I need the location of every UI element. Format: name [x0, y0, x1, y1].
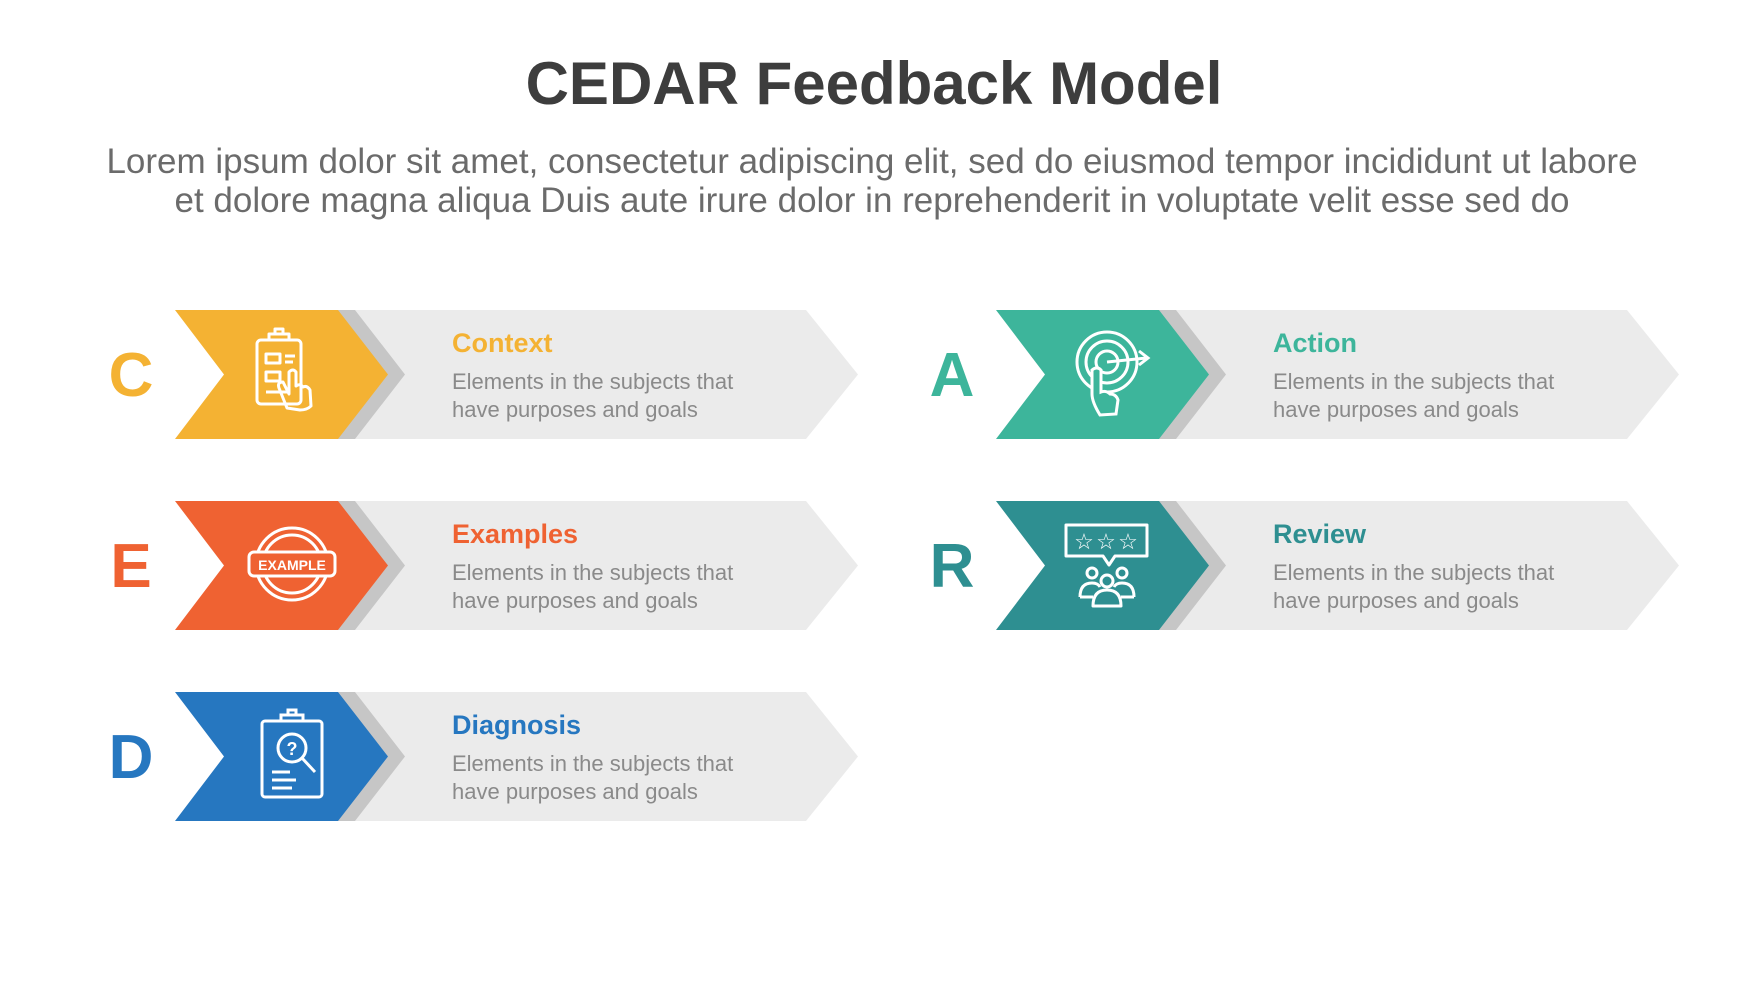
- body text: Elements in the subjects that: [452, 751, 733, 776]
- body text: have purposes and goals: [452, 779, 698, 804]
- letter E: E: [110, 532, 152, 601]
- icon: clipboard hand: [257, 329, 311, 410]
- body text: [452, 751, 733, 804]
- icon: rating group: ☆: [1074, 529, 1094, 554]
- body text: have purposes and goals: [1273, 588, 1519, 613]
- icon: example badge: EXAMPLE: [258, 557, 326, 573]
- heading: Diagnosis: [452, 710, 581, 740]
- icon: clipboard magnifier: [262, 710, 322, 797]
- panel: A action: [930, 310, 1679, 439]
- body text: have purposes and goals: [1273, 397, 1519, 422]
- body text: Elements in the subjects that: [1273, 369, 1554, 394]
- icon: example badge: [249, 528, 335, 600]
- body text: [1273, 369, 1554, 422]
- icon: rating group: ☆: [1118, 529, 1138, 554]
- letter D: D: [109, 723, 153, 792]
- icon: clipboard magnifier: ?: [286, 739, 298, 759]
- heading: Review: [1273, 519, 1367, 549]
- letter C: C: [109, 341, 153, 410]
- panel: R review: [930, 501, 1679, 630]
- icon: rating group: ☆: [1096, 529, 1116, 554]
- body text: Elements in the subjects that: [452, 560, 733, 585]
- panel: D diagnosis: [109, 692, 858, 821]
- panel: C context: [109, 310, 858, 439]
- subtitle: Lorem ipsum dolor sit amet, consectetur adipiscing elit, sed do eiusmod tempor incididunt ut labore: [106, 142, 1638, 181]
- body text: [452, 369, 733, 422]
- body text: have purposes and goals: [452, 397, 698, 422]
- body text: have purposes and goals: [452, 588, 698, 613]
- body text: Elements in the subjects that: [452, 369, 733, 394]
- icon: target touch: [1077, 332, 1148, 415]
- body text: Elements in the subjects that: [1273, 560, 1554, 585]
- subtitle: [106, 142, 1638, 220]
- body text: [452, 560, 733, 613]
- panel: E examples: [110, 501, 858, 630]
- heading: Action: [1273, 328, 1357, 358]
- icon: rating group: [1066, 525, 1147, 606]
- letter R: R: [930, 532, 974, 601]
- heading: Examples: [452, 519, 578, 549]
- letter A: A: [930, 341, 974, 410]
- title: CEDAR Feedback Model: [526, 50, 1222, 117]
- body text: [1273, 560, 1554, 613]
- heading: Context: [452, 328, 553, 358]
- subtitle: et dolore magna aliqua Duis aute irure dolor in reprehenderit in voluptate velit esse sed do: [174, 181, 1570, 220]
